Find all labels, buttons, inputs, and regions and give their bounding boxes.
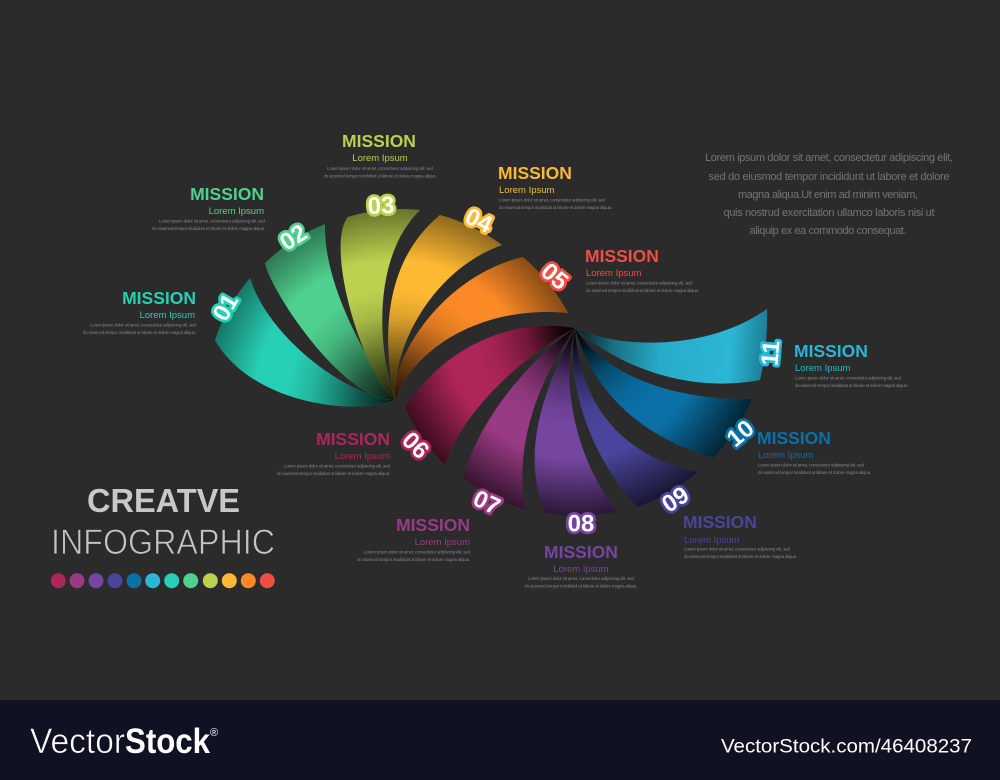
label 11: do eiusmod tempor incididunt ut labore et dolore magna aliqua.: [795, 383, 908, 388]
badge 08: 08: [568, 510, 594, 538]
logo: [30, 722, 218, 761]
segment 07: [463, 328, 575, 510]
intro paragraph: quis nostrud exercitation ullamco laboris nisi ut: [724, 207, 934, 219]
label 04: Lorem Ipsum: [499, 185, 555, 196]
badge 06: 06: [396, 427, 434, 465]
right fan: [405, 309, 767, 516]
label 06: [277, 429, 391, 476]
label 07: Lorem ipsum dolor sit amet, consectetur adipiscing elit, sed: [364, 550, 471, 554]
label 02: Lorem Ipsum: [209, 206, 264, 217]
label 10: Lorem ipsum dolor sit amet, consectetur adipiscing elit, sed: [758, 462, 865, 468]
label 01: Lorem Ipsum: [140, 310, 195, 321]
label 08: do eiusmod tempor incididunt ut labore et dolore magna aliqua.: [524, 584, 638, 588]
label 04: Lorem ipsum dolor sit amet, consectetur adipiscing elit, sed: [499, 198, 606, 202]
segment 06: [405, 326, 575, 465]
label 07: Lorem Ipsum: [415, 537, 470, 548]
label 06: Lorem ipsum dolor sit amet, consectetur adipiscing elit, sed: [284, 464, 391, 468]
badge 07: 07: [469, 485, 504, 521]
label 09: do eiusmod tempor incididunt ut labore et dolore magna aliqua.: [684, 554, 797, 559]
badge 02: 02: [275, 219, 312, 256]
label 09: [683, 512, 797, 559]
label 01: [83, 288, 197, 335]
label 05: Lorem Ipsum: [586, 268, 642, 279]
segment 02: [265, 224, 395, 400]
label 03: [324, 131, 436, 178]
label 01: MISSION: [122, 288, 196, 308]
segment 10: [575, 328, 752, 458]
title: INFOGRAPHIC: [51, 523, 275, 562]
segment 04: [388, 215, 502, 400]
label 07: MISSION: [396, 515, 470, 535]
label 10: Lorem Ipsum: [758, 450, 814, 461]
title: [51, 483, 275, 562]
label 06: Lorem Ipsum: [335, 451, 390, 462]
image id: VectorStock.com/46408237: [721, 736, 972, 758]
label 11: Lorem ipsum dolor sit amet, consectetur adipiscing elit, sed: [795, 376, 902, 380]
label 03: Lorem Ipsum: [352, 153, 408, 164]
left fan: [215, 209, 568, 407]
label 10: [757, 428, 871, 475]
label 06: do eiusmod tempor incididunt ut labore et dolore magna aliqua.: [277, 471, 390, 476]
label 03: MISSION: [342, 131, 416, 151]
segment 01: [215, 278, 395, 407]
badge 03: 03: [367, 192, 395, 220]
label 08: Lorem ipsum dolor sit amet, consectetur adipiscing elit, sed: [528, 576, 635, 581]
logo: Vector: [30, 722, 125, 761]
label 04: [498, 163, 612, 210]
intro paragraph: sed do eiusmod tempor incididunt ut labore et dolore: [708, 171, 950, 183]
label 06: MISSION: [316, 429, 390, 449]
label 11: MISSION: [794, 341, 868, 361]
segment 08: [535, 328, 617, 516]
label 01: do eiusmod tempor incididunt ut labore et dolore magna aliqua.: [83, 330, 196, 335]
logo: ®: [210, 727, 218, 739]
badge 10: 10: [722, 415, 760, 453]
label 08: MISSION: [544, 542, 618, 562]
intro paragraph: Lorem ipsum dolor sit amet, consectetur adipiscing elit,: [705, 152, 953, 164]
segment 09: [573, 328, 698, 507]
segment 03: [341, 209, 420, 400]
segment 11: [575, 309, 767, 384]
label 10: do eiusmod tempor incididunt ut labore et dolore magna aliqua.: [758, 470, 871, 475]
label 04: MISSION: [498, 163, 572, 183]
label 05: [585, 246, 699, 293]
label 02: MISSION: [190, 184, 264, 204]
label 10: MISSION: [757, 428, 831, 448]
number badges: [207, 192, 786, 538]
label 05: Lorem ipsum dolor sit amet, consectetur adipiscing elit, sed: [586, 280, 693, 286]
colour dots legend: [51, 573, 275, 588]
label 03: Lorem ipsum dolor sit amet, consectetur adipiscing elit, sed: [327, 166, 434, 171]
label 01: Lorem ipsum dolor sit amet, consectetur adipiscing elit, sed: [90, 322, 197, 328]
segment 05: [395, 257, 568, 400]
label 05: do eiusmod tempor incididunt ut labore et dolore magna aliqua.: [586, 288, 699, 293]
label 02: do eiusmod tempor incididunt ut labore et dolore magna aliqua.: [152, 226, 265, 231]
label 02: Lorem ipsum dolor sit amet, consectetur adipiscing elit, sed: [159, 218, 266, 224]
badge 04: 04: [461, 203, 497, 239]
title: CREATVE: [87, 483, 240, 520]
label 07: do eiusmod tempor incididunt ut labore et dolore magna aliqua.: [357, 557, 470, 562]
badge 11: 11: [756, 339, 786, 367]
badge 09: 09: [657, 481, 694, 518]
badge 05: 05: [535, 258, 573, 296]
intro paragraph: [705, 152, 953, 237]
logo: Stock: [125, 722, 210, 761]
intro paragraph: magna aliqua.Ut enim ad minim veniam,: [738, 189, 918, 201]
label 09: MISSION: [683, 512, 757, 532]
label 08: [524, 542, 638, 588]
label 11: [794, 341, 908, 388]
label 03: do eiusmod tempor incididunt ut labore et dolore magna aliqua.: [324, 174, 436, 178]
label 02: [152, 184, 266, 231]
label 04: do eiusmod tempor incididunt ut labore et dolore magna aliqua.: [499, 205, 612, 210]
badge 01: 01: [207, 289, 244, 326]
label 09: Lorem ipsum dolor sit amet, consectetur adipiscing elit, sed: [684, 546, 791, 552]
label 09: Lorem Ipsum: [684, 535, 740, 546]
label 08: Lorem Ipsum: [553, 564, 609, 575]
label 07: [357, 515, 471, 562]
label 05: MISSION: [585, 246, 659, 266]
footer band: [0, 700, 1000, 780]
intro paragraph: aliquip ex ea commodo consequat.: [750, 225, 906, 237]
label 11: Lorem Ipsum: [795, 363, 851, 374]
